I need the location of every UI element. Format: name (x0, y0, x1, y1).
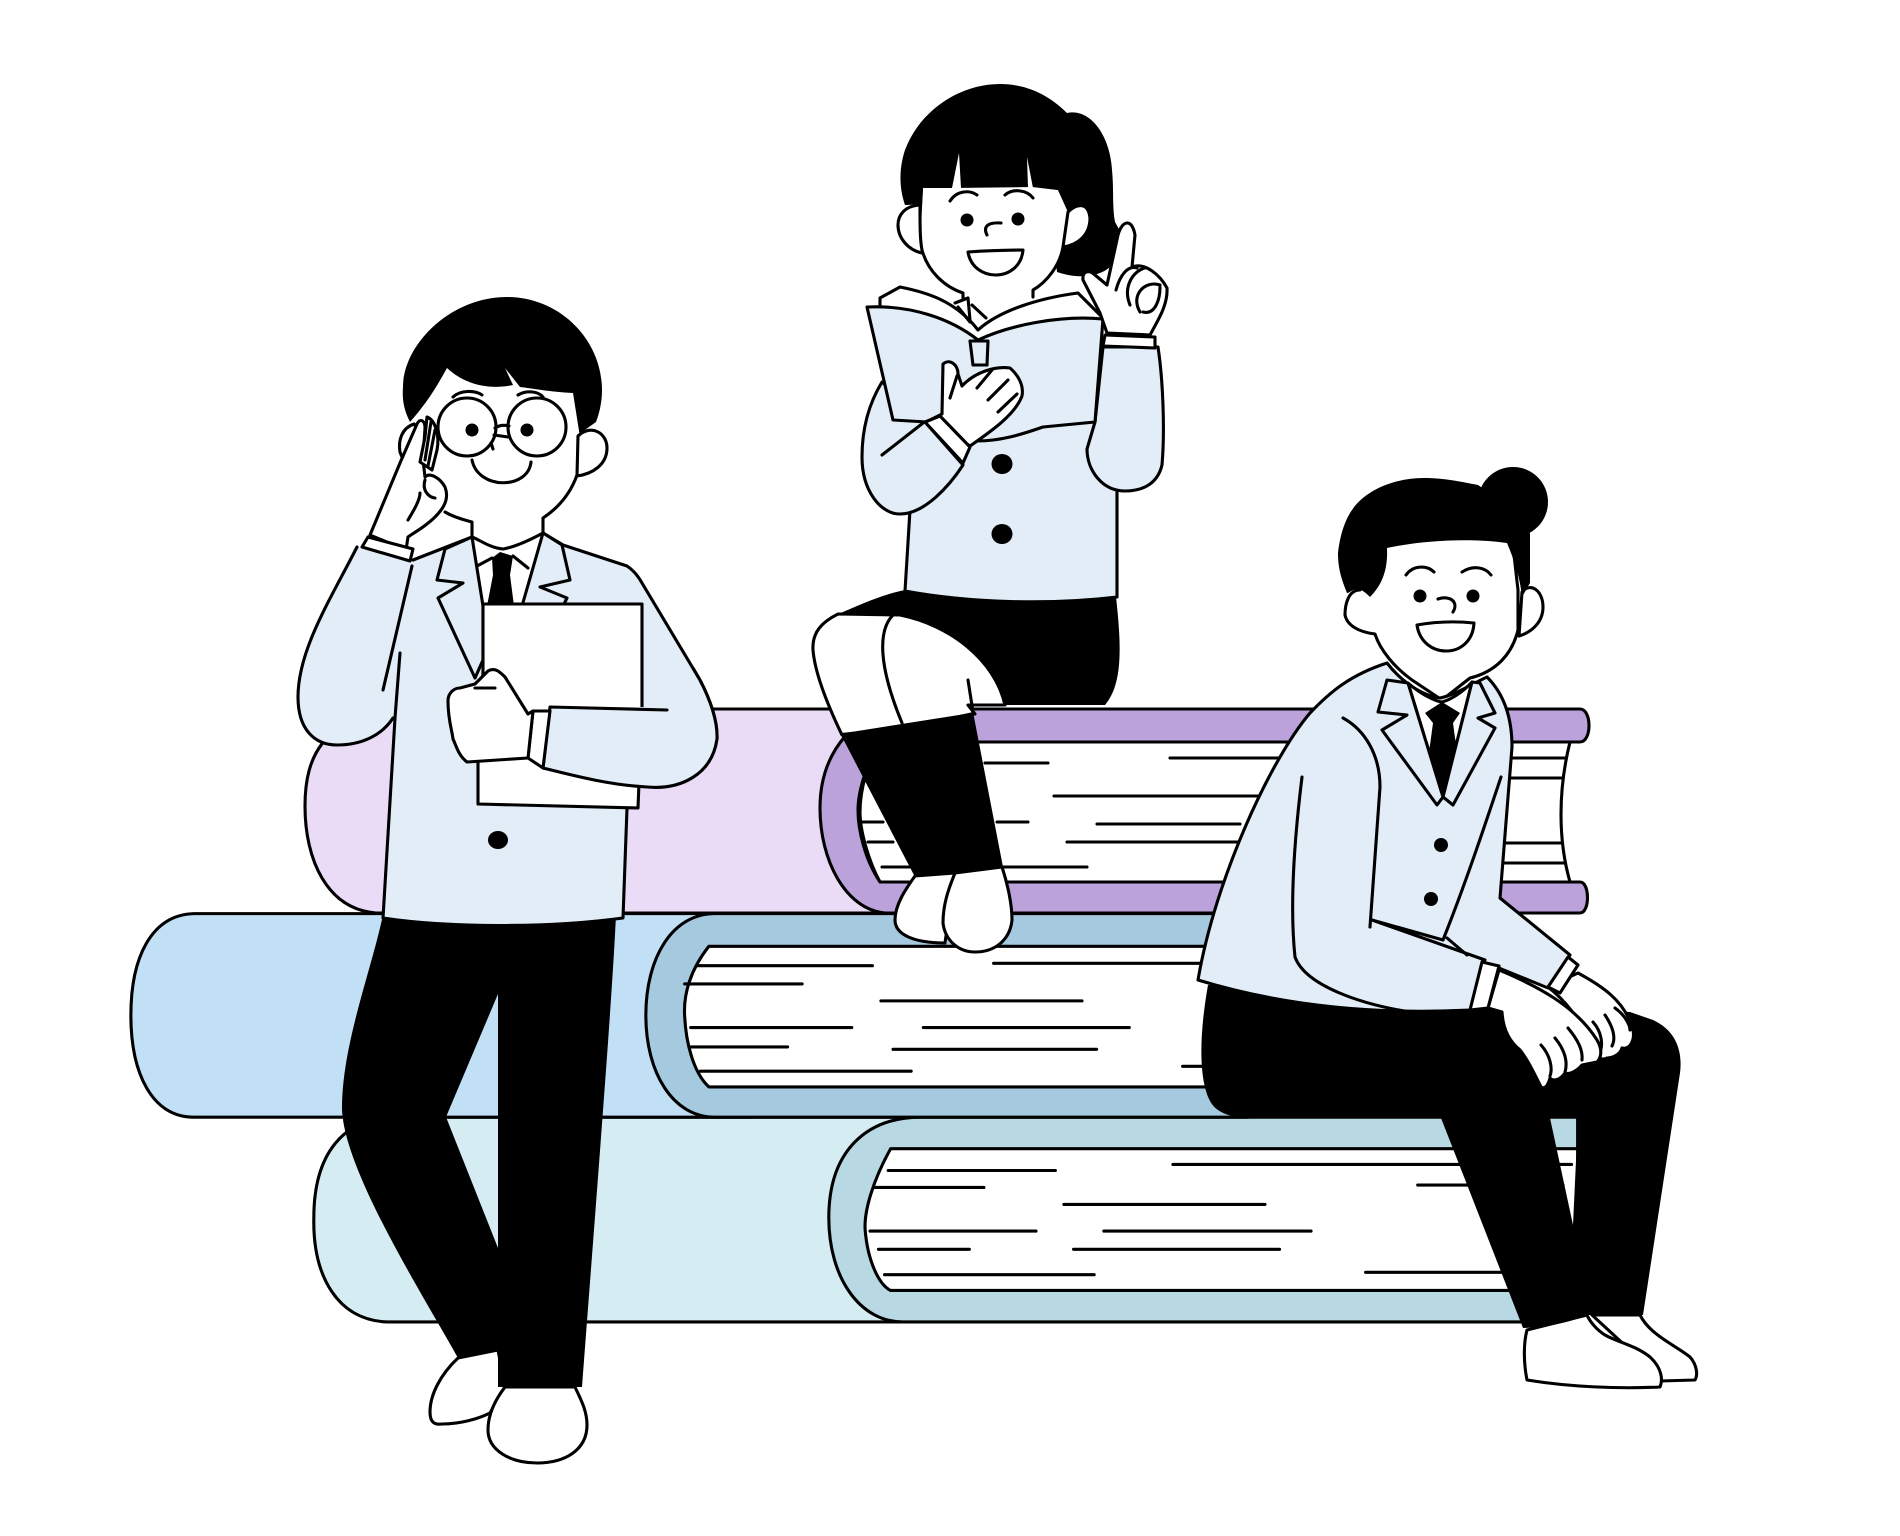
student jacket (1198, 663, 1570, 1013)
boy raised hand (362, 417, 447, 561)
girl head (898, 110, 1090, 310)
book: middle blue (131, 914, 1248, 1117)
boy cuff (528, 711, 550, 768)
boy forearm (543, 668, 717, 787)
student head (1338, 467, 1548, 700)
boy trousers (342, 915, 616, 1387)
boy raised cuff (362, 537, 413, 561)
student lapels (1378, 680, 1495, 805)
girl buttons (992, 454, 1012, 544)
boy shoes (430, 1350, 587, 1463)
boy button (488, 831, 508, 849)
boy folder (478, 604, 642, 808)
girl cuff (925, 416, 970, 463)
girl ear right (1063, 206, 1090, 247)
boy jacket (298, 533, 717, 926)
girl feet (895, 867, 1012, 952)
boy lapels (437, 533, 570, 678)
boy smile (472, 460, 531, 483)
figure: boy with glasses (298, 297, 717, 1463)
girl socks (840, 712, 1003, 877)
book: top purple (305, 709, 1589, 913)
girl book hand (925, 362, 1022, 463)
girl skirt (838, 590, 1120, 705)
girl hair and ponytail (900, 84, 1125, 276)
student hands (1470, 957, 1633, 1088)
boy shirt and tie (472, 533, 543, 606)
boy glasses (438, 391, 566, 456)
student trousers (1201, 985, 1681, 1328)
girl book (867, 287, 1103, 441)
student hair (1338, 478, 1530, 597)
girl cuff right (1103, 335, 1155, 348)
girl raised hand (1083, 223, 1167, 348)
student shoes (1524, 1315, 1697, 1388)
student bun (1478, 467, 1548, 537)
figure: girl reading (813, 84, 1167, 952)
book: bottom teal (314, 1117, 1578, 1322)
girl legs (813, 614, 1005, 735)
student shirt and tie (1408, 682, 1472, 797)
boy fist (448, 670, 533, 762)
figure: student with bun (1198, 467, 1697, 1388)
boy hair (403, 297, 602, 437)
student jacket buttons (1424, 838, 1448, 906)
boy head (400, 297, 607, 548)
girl bangs (905, 110, 1080, 212)
student cuffs (1470, 962, 1499, 1010)
girl jacket body (862, 347, 1163, 602)
